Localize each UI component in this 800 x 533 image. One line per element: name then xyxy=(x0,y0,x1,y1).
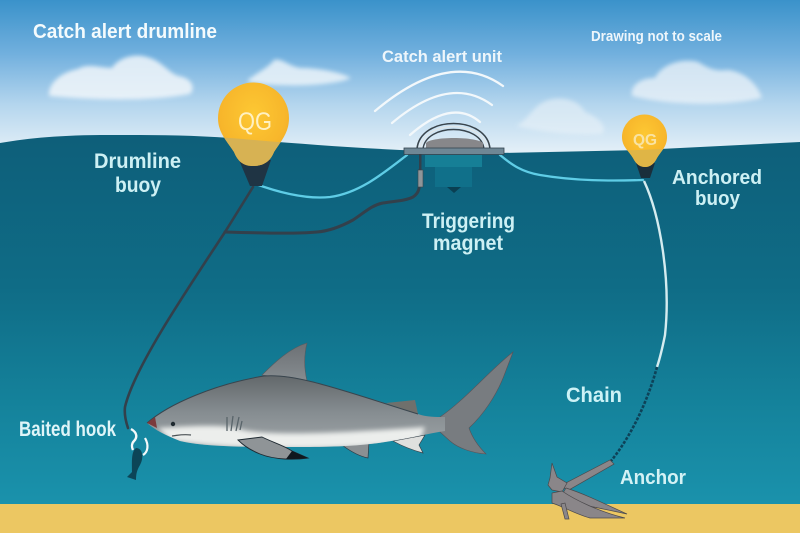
shark tail xyxy=(440,352,513,454)
shark belly highlight xyxy=(158,426,425,448)
light blue connecting line xyxy=(253,155,643,197)
anchored buoy label: buoy xyxy=(695,187,741,210)
sea floor xyxy=(0,504,800,533)
catch alert unit label: Catch alert unit xyxy=(382,48,502,66)
catch alert unit xyxy=(404,124,504,193)
shark pectoral fin xyxy=(238,437,308,459)
cloud right of unit xyxy=(516,98,604,135)
shark anal fin xyxy=(393,435,425,453)
shark body xyxy=(147,376,445,447)
anchored buoy line xyxy=(644,181,667,367)
triggering magnet label: Triggering xyxy=(422,210,515,233)
shark gills xyxy=(227,416,242,431)
shark mouth xyxy=(172,435,191,436)
shark eye xyxy=(171,422,175,426)
title: Catch alert drumline xyxy=(33,21,217,43)
shark xyxy=(147,343,513,459)
chain xyxy=(611,367,657,461)
anchor xyxy=(548,460,627,519)
note: drawing not to scale: Drawing not to scale xyxy=(591,29,722,45)
cloud left xyxy=(49,56,193,100)
drumline buoy xyxy=(218,82,289,186)
shark pelvic fin xyxy=(342,442,369,458)
shark second dorsal fin xyxy=(386,400,418,414)
cloud centre xyxy=(248,60,351,85)
buoy QG mark: QG xyxy=(238,108,272,136)
shark nose xyxy=(147,417,157,428)
baited hook label: Baited hook xyxy=(19,418,116,441)
chain label: Chain xyxy=(566,384,622,407)
sky background xyxy=(0,0,800,160)
drumline rope xyxy=(125,170,420,428)
drumline buoy label: buoy xyxy=(115,174,161,197)
anchored buoy label: Anchored xyxy=(672,166,762,189)
shark dorsal fin xyxy=(262,343,307,381)
anchored buoy xyxy=(622,115,667,178)
anchor label: Anchor xyxy=(620,466,686,489)
baited hook and bait fish xyxy=(127,429,147,480)
drumline buoy label: Drumline xyxy=(94,150,181,173)
anchored buoy QG mark: QG xyxy=(633,132,657,149)
triggering magnet label: magnet xyxy=(433,232,503,255)
cloud far right xyxy=(632,61,762,104)
sea xyxy=(0,135,800,533)
signal waves xyxy=(375,72,503,135)
shark pectoral fin tip xyxy=(286,451,308,459)
